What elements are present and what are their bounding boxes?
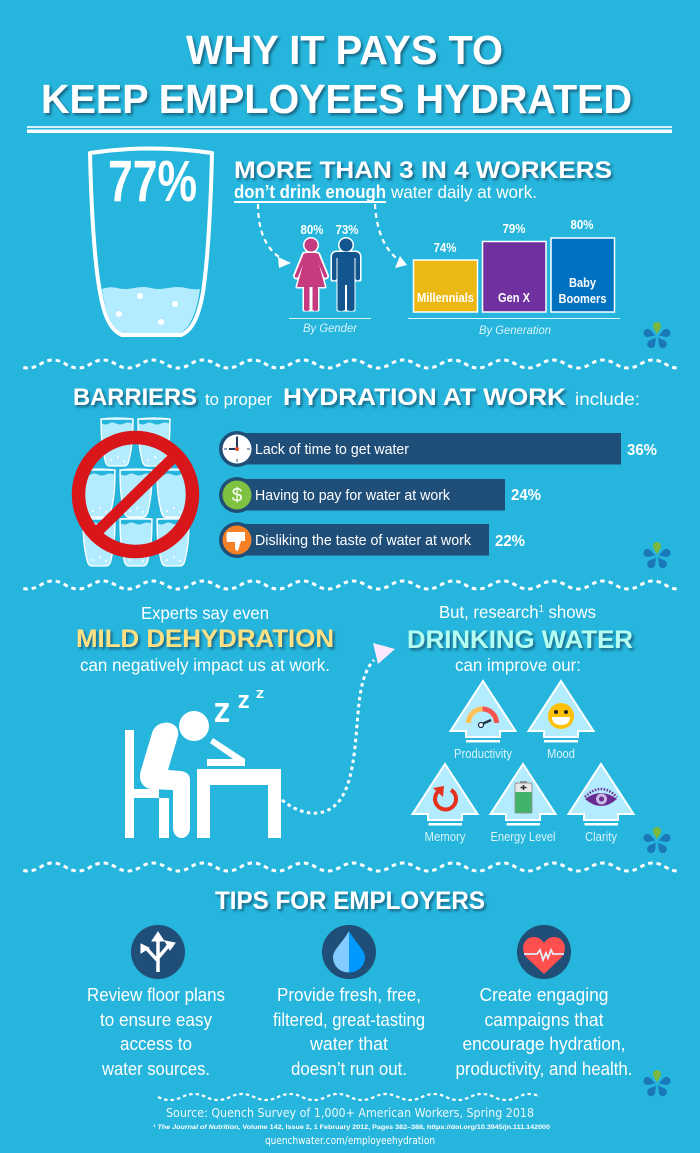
panel: 3 in 4 workers xyxy=(90,148,672,350)
tip: floor plans: water sources. xyxy=(101,1059,210,1079)
tip: filtered water: water that xyxy=(309,1034,388,1054)
chart: by gender: 73% xyxy=(336,223,358,237)
heading: more than 3 in 4 workers: MORE THAN 3 IN 4 WORKERS xyxy=(234,157,612,184)
panel: barriers xyxy=(73,384,672,570)
text: drinking water xyxy=(407,602,633,675)
text: drinking water: But, research xyxy=(439,602,543,622)
tip: engaging campaigns: productivity, and health. xyxy=(456,1059,632,1079)
panel: drinking water xyxy=(407,602,672,855)
heading: barriers xyxy=(73,384,640,411)
icon: productivity: Productivity xyxy=(454,747,513,761)
icon: clarity: Clarity xyxy=(585,830,618,844)
footer: sources: Source: Quench Survey of 1,000+ American Workers, Spring 2018 xyxy=(166,1105,534,1120)
icon: heart pulse xyxy=(517,925,571,979)
tip: filtered water: filtered, great-tasting xyxy=(273,1010,425,1030)
icon: water glass 77%: 77% xyxy=(108,149,197,214)
arrow: to generation xyxy=(375,204,407,268)
bar: millennials: Millennials xyxy=(417,290,474,305)
title: WHY IT PAYS TO xyxy=(186,27,503,73)
title: KEEP EMPLOYEES HYDRATED xyxy=(41,76,632,122)
icon: energy level: Energy Level xyxy=(490,830,556,844)
icon: clock xyxy=(222,434,252,464)
chart: by generation: 74% xyxy=(434,241,456,255)
logo xyxy=(642,542,672,570)
heading: barriers: to proper xyxy=(205,390,272,409)
tip: filtered water xyxy=(273,925,425,1079)
bar: disliking taste xyxy=(219,522,525,558)
bar: having to pay xyxy=(219,477,541,513)
bar: lack of time: 36% xyxy=(627,442,657,459)
icon: branching arrows xyxy=(131,925,185,979)
text: drinking water: 1 xyxy=(539,604,544,615)
footer: sources: The Journal of Nutrition, xyxy=(155,1124,241,1131)
bar: having to pay: Having to pay for water at work xyxy=(255,488,451,504)
bar: gen x: Gen X xyxy=(498,290,530,305)
icon: mood: Mood xyxy=(547,747,575,761)
bar: millennials xyxy=(414,260,478,312)
heading: barriers: include: xyxy=(575,389,640,409)
icon: sleeping worker: Z xyxy=(238,692,250,713)
panel: mild dehydration xyxy=(76,603,395,838)
chart: by generation: 79% xyxy=(502,222,526,236)
bar: disliking taste: 22% xyxy=(495,533,525,550)
logo xyxy=(642,1070,672,1098)
icon: memory: Memory xyxy=(424,830,466,844)
icon: productivity xyxy=(450,681,516,761)
heading: barriers: BARRIERS xyxy=(73,384,197,411)
bar: baby boomers xyxy=(551,238,614,312)
icon: thumbs down xyxy=(222,526,252,554)
footer: sources xyxy=(153,1105,550,1147)
tip: filtered water: Provide fresh, free, xyxy=(277,985,421,1005)
footer: sources: Volume 142, Issue 2, 1 February 2012, Pages 382–388, https://doi.org/10.3945/jn.111.142000 xyxy=(242,1124,522,1131)
icon: water glass 77% xyxy=(90,148,212,335)
footer: sources: 1 xyxy=(153,1123,156,1128)
text: drinking water: can improve our: xyxy=(455,655,581,675)
chart: by generation: 80% xyxy=(570,218,594,232)
icon: water drop xyxy=(322,925,376,979)
tip: floor plans: to ensure easy xyxy=(100,1010,212,1030)
text: mild dehydration: can negatively impact us at work. xyxy=(80,655,330,675)
icon: woman xyxy=(296,238,326,311)
logo xyxy=(642,322,672,350)
bar: baby boomers: Boomers xyxy=(558,291,606,306)
bar: gen x xyxy=(482,242,546,312)
tip: engaging campaigns: encourage hydration, xyxy=(462,1034,626,1054)
subheading: don't drink enough: water daily at work. xyxy=(390,182,537,202)
chart: by generation: By Generation xyxy=(479,323,551,337)
icon: sleeping worker xyxy=(125,688,281,838)
bar: disliking taste: Disliking the taste of water at work xyxy=(255,533,472,549)
tip: floor plans: access to xyxy=(120,1034,192,1054)
bar: baby boomers: Baby xyxy=(569,275,597,290)
icon: sleeping worker: Z xyxy=(214,699,230,729)
subheading: don't drink enough xyxy=(234,182,537,203)
tip: floor plans xyxy=(87,925,225,1079)
tip: engaging campaigns xyxy=(456,925,632,1079)
arrow: dehydration to drinking water xyxy=(282,643,395,813)
bar: having to pay: 24% xyxy=(511,487,541,504)
subheading: don't drink enough: don’t drink enough xyxy=(234,182,386,202)
heading: barriers: HYDRATION AT WORK xyxy=(283,384,567,411)
chart: by generation xyxy=(408,218,620,337)
icon: memory xyxy=(412,764,478,844)
text: mild dehydration: Experts say even xyxy=(141,603,269,623)
title xyxy=(41,27,632,122)
icon: man xyxy=(332,238,360,311)
chart: by gender xyxy=(289,223,371,335)
text: mild dehydration xyxy=(76,603,334,675)
panel: tips for employers xyxy=(87,887,672,1098)
icon: dollar xyxy=(222,480,252,510)
tip: engaging campaigns: Create engaging xyxy=(480,985,608,1005)
text: drinking water: DRINKING WATER xyxy=(407,626,633,654)
arrow: to gender xyxy=(258,204,291,268)
icon: clarity xyxy=(568,764,634,844)
icon: mood xyxy=(528,681,594,761)
icon: no glasses xyxy=(78,418,192,566)
chart: by gender: By Gender xyxy=(303,321,358,335)
icon: sleeping worker: Z xyxy=(256,688,264,701)
bar: lack of time: Lack of time to get water xyxy=(255,442,409,458)
heading: tips for employers: TIPS FOR EMPLOYERS xyxy=(215,887,485,915)
icon: dollar: $ xyxy=(232,486,243,506)
text: mild dehydration: MILD DEHYDRATION xyxy=(76,625,334,653)
chart: by gender: 80% xyxy=(300,223,324,237)
bar: lack of time xyxy=(219,431,657,467)
tip: floor plans: Review floor plans xyxy=(87,985,225,1005)
tip: engaging campaigns: campaigns that xyxy=(484,1010,604,1030)
logo xyxy=(642,827,672,855)
tip: filtered water: doesn’t run out. xyxy=(291,1059,407,1079)
text: drinking water: shows xyxy=(544,602,596,622)
footer: sources: quenchwater.com/employeehydration xyxy=(265,1135,435,1147)
icon: energy level xyxy=(490,764,556,844)
